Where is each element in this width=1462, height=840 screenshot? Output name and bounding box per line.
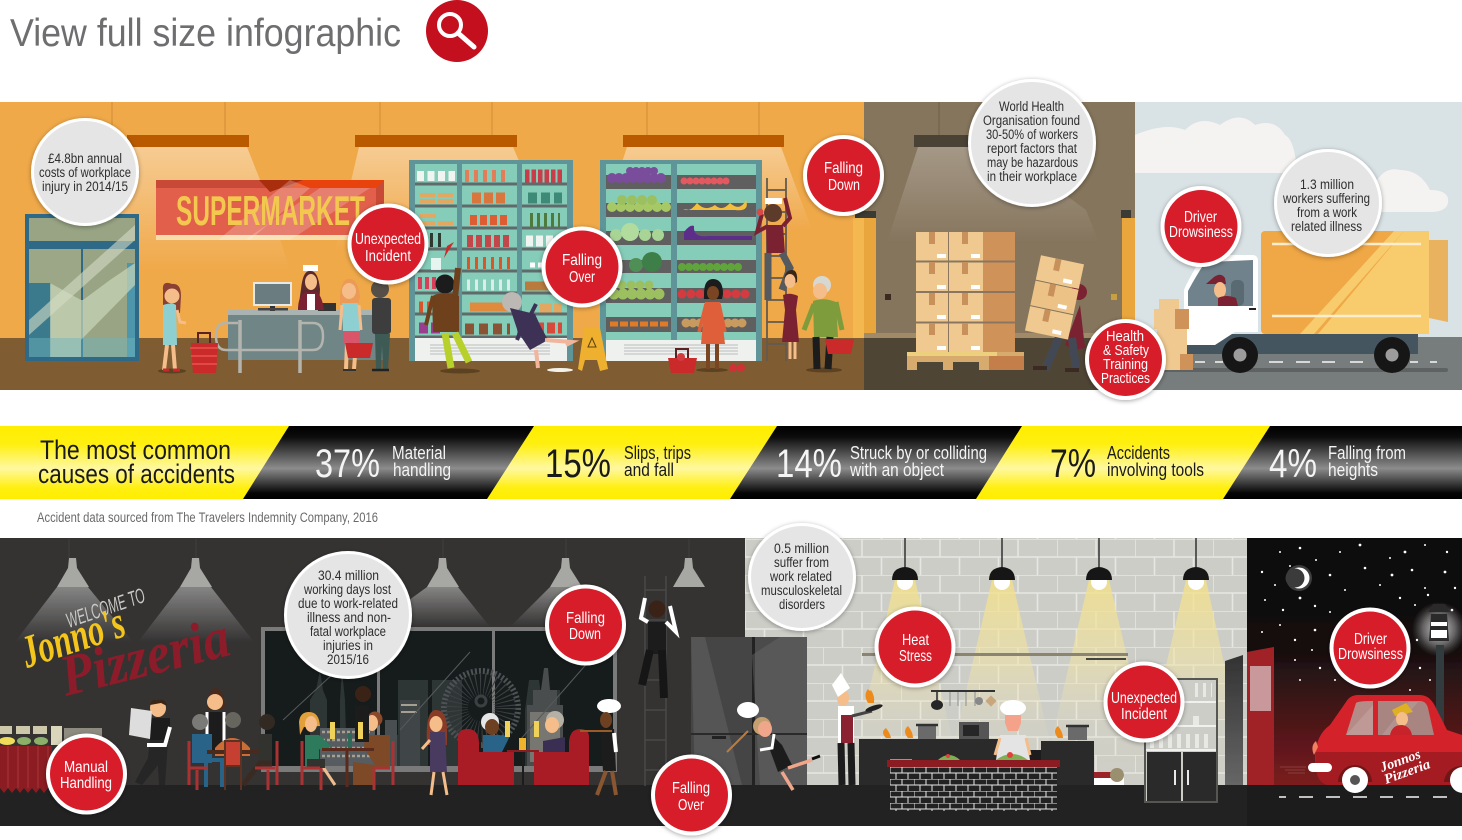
clouds (1135, 118, 1448, 212)
callout: £4.8bn annual costs (31, 118, 139, 226)
callout: health and safety training practices: Training (1103, 356, 1148, 373)
callout: World Health Organisation: Organisation found (983, 113, 1080, 128)
callout: driver drowsiness truck (1160, 186, 1242, 267)
callout: 1.3 million workers: workers suffering (1282, 191, 1370, 206)
panel: delivery truck scene (1135, 102, 1462, 390)
cashier (298, 265, 324, 310)
pizzeria wall sign: Jonno's (14, 596, 131, 678)
callout: falling down supermarket: Falling (824, 160, 863, 177)
callout: falling over supermarket: Over (569, 269, 596, 286)
waiter carrying plates (129, 699, 170, 785)
pendant lamps (15, 539, 705, 642)
basket stack (190, 333, 218, 373)
entrance door (25, 214, 139, 361)
callout: 1.3 million workers: from a work (1297, 205, 1357, 220)
woman with basket (340, 279, 373, 370)
panel: pizzeria restaurant scene (0, 538, 745, 826)
callout: unexpected incident supermarket (348, 204, 428, 284)
kitchen island (887, 752, 1060, 811)
callout: World Health Organisation: report factors that (987, 141, 1077, 156)
stars (1261, 544, 1456, 691)
truck driver (1206, 275, 1256, 310)
callout: manual handling (46, 734, 127, 814)
shoppers at checkout (158, 265, 391, 374)
stat: 15% slips, trips and fall: and fall (624, 460, 674, 480)
callout: 1.3 million workers (1274, 149, 1382, 257)
callout: driver drowsiness truck: Drowsiness (1169, 224, 1233, 241)
restaurant window and skyline (261, 627, 617, 772)
warehouse ceiling light (886, 135, 1100, 245)
pizza delivery car: Jonnos (1377, 747, 1423, 776)
man at checkout (371, 280, 391, 370)
woman in orange dress (696, 279, 728, 372)
callout: falling over pizzeria: Over (678, 797, 705, 814)
tall fridge edge (1225, 655, 1243, 785)
source note: Accident data sourced from The Travelers Indemnity Company, 2016 (37, 510, 378, 525)
stat: 4% falling from heights: heights (1328, 460, 1378, 480)
truck (1160, 231, 1448, 373)
callout: 0.5 million musculoskeletal disorders: suffer from (774, 555, 829, 570)
callout: 30.4 million working days: 30.4 million (318, 568, 379, 583)
callout: falling down pizzeria: Falling (566, 610, 605, 627)
supermarket sign (156, 180, 384, 240)
delivery van edge (1247, 647, 1274, 785)
stat: 15% slips, trips and fall (545, 442, 691, 486)
callout: 30.4 million working days: working days lost (303, 582, 391, 597)
callout: falling down pizzeria (545, 584, 626, 666)
stat: 4% falling from heights: Falling from (1328, 443, 1406, 463)
callout: 0.5 million musculoskeletal disorders: 0.5 million (774, 541, 829, 556)
callout: manual handling: Manual (64, 759, 108, 776)
callout: 0.5 million musculoskeletal disorders (748, 523, 856, 631)
callout: World Health Organisation: World Health (999, 99, 1064, 114)
callout: unexpected incident kitchen: Incident (1121, 706, 1167, 723)
stat: 15% slips, trips and fall: Slips, trips (624, 443, 691, 463)
ceiling lights (60, 135, 812, 270)
road markings (1279, 796, 1447, 798)
falling waitress (727, 702, 820, 790)
crescent moon (1286, 565, 1312, 591)
car driver (1390, 703, 1413, 735)
callout: driver drowsiness night: Driver (1354, 631, 1388, 648)
callout: falling over supermarket (542, 226, 622, 308)
shelf bar and utensils (862, 653, 1128, 710)
panel: warehouse scene (853, 102, 1135, 390)
wet floor sign and spill (547, 328, 608, 372)
title: view full size infographic: View full size infographic (10, 12, 401, 55)
waitress (782, 270, 799, 359)
callout: 30.4 million working days (284, 551, 412, 679)
ladder and waiter reaching lamp (641, 576, 676, 786)
pizzeria wall sign: Pizzeria (53, 604, 236, 709)
callout: unexpected incident supermarket: Incident (365, 248, 411, 265)
callout: 30.4 million working days: illness and non- (307, 610, 391, 625)
callout: driver drowsiness night (1330, 608, 1410, 688)
panel: commercial kitchen scene (691, 538, 1247, 826)
old man with basket (804, 276, 854, 372)
callout: falling over pizzeria (651, 754, 732, 836)
callout: World Health Organisation (968, 79, 1096, 207)
callout: 30.4 million working days: 2015/16 (327, 652, 369, 667)
shelving unit: groceries (409, 160, 573, 361)
stepladder (767, 178, 786, 361)
icon: magnifying glass button (426, 0, 488, 62)
stat: 7% accidents involving tools: Accidents (1107, 443, 1170, 463)
stat: 14% struck by or colliding with an object: 14% (776, 442, 842, 486)
stat: 7% accidents involving tools: 7% (1050, 442, 1096, 486)
callout: 0.5 million musculoskeletal disorders: work related (769, 569, 832, 584)
waitress with pizza (580, 699, 621, 795)
cooking range (859, 722, 1094, 785)
buffet table (0, 726, 102, 793)
stat: 7% accidents involving tools: involving tools (1107, 460, 1204, 480)
callout: 30.4 million working days: injuries in (323, 638, 373, 653)
callout: health and safety training practices: Health (1106, 328, 1144, 345)
callout: falling down supermarket (803, 135, 884, 216)
pizzeria wall sign (14, 584, 236, 709)
callout: World Health Organisation: in their workplace (987, 169, 1077, 184)
stat: 7% accidents involving tools (1050, 442, 1204, 486)
warehouse door rails (853, 210, 1135, 338)
callout: heat stress: Heat (902, 632, 929, 649)
man on ladder (756, 198, 790, 300)
callout: falling over pizzeria: Falling (672, 780, 710, 797)
hazard stripe banner: most common causes of accidents (0, 426, 1462, 499)
callout: unexpected incident kitchen: Unexpected (1111, 690, 1177, 707)
callout: 0.5 million musculoskeletal disorders: musculoskeletal (761, 583, 842, 598)
supermarket sign: SUPERMARKET (176, 187, 365, 234)
couple at window table (299, 686, 393, 790)
callout: 0.5 million musculoskeletal disorders: disorders (779, 597, 825, 612)
callout: unexpected incident kitchen (1104, 662, 1184, 742)
pizza delivery car: Pizzeria (1382, 757, 1432, 788)
panel: night-time pizza delivery scene (1247, 538, 1462, 826)
basket and apples on floor (668, 349, 745, 373)
callout: heat stress: Stress (899, 648, 932, 665)
chef tossing flaming pan (832, 673, 883, 785)
street lamp (1412, 602, 1462, 727)
callout: unexpected incident supermarket: Unexpected (355, 231, 421, 248)
callout: World Health Organisation: 30-50% of workers (986, 127, 1078, 142)
callout: health and safety training practices: Practices (1101, 370, 1150, 387)
callout: driver drowsiness truck: Driver (1184, 209, 1218, 226)
pendant lamps with yellow light (847, 538, 1247, 785)
stat: 37% material handling (315, 442, 451, 486)
stat: 4% falling from heights (1269, 442, 1406, 486)
stat: 15% slips, trips and fall: 15% (545, 442, 611, 486)
collapsed worker (1094, 768, 1124, 785)
chef at island (995, 700, 1030, 760)
banner heading: causes of accidents (38, 459, 235, 489)
callout: health and safety training practices (1085, 319, 1166, 400)
table of four diners (189, 688, 277, 790)
banner heading (38, 435, 235, 489)
pizzeria wall sign: WELCOME TO (63, 584, 148, 633)
callout: 1.3 million workers: related illness (1291, 219, 1362, 234)
callout: £4.8bn annual costs: costs of workplace (39, 165, 131, 180)
woman in purple dress (422, 710, 447, 795)
callout: driver drowsiness night: Drowsiness (1338, 646, 1403, 663)
stacked parcels by truck (1154, 299, 1193, 370)
stat: 4% falling from heights: 4% (1269, 442, 1317, 486)
callout: health and safety training practices: & Safety (1103, 342, 1149, 359)
cabinet with crockery (1145, 679, 1217, 802)
fridge (691, 637, 807, 785)
callout: World Health Organisation: may be hazardous (987, 155, 1078, 170)
worker carrying boxes (1025, 255, 1087, 370)
banner heading: The most common (40, 435, 231, 465)
falling woman (502, 292, 572, 368)
panel: supermarket scene (0, 102, 864, 390)
callout: falling over supermarket: Falling (562, 252, 602, 269)
pizza delivery car (1280, 695, 1462, 793)
callout: £4.8bn annual costs: £4.8bn annual (48, 151, 122, 166)
stat: 37% material handling: 37% (315, 442, 380, 486)
couple in armchairs (458, 711, 589, 785)
callout: 30.4 million working days: fatal workplace (310, 624, 386, 639)
callout: heat stress (874, 606, 956, 688)
callout: 30.4 million working days: due to work-related (298, 596, 398, 611)
stat: 37% material handling: handling (393, 460, 451, 480)
callout: falling down supermarket: Down (828, 177, 860, 194)
callout: £4.8bn annual costs: injury in 2014/15 (42, 179, 128, 194)
callout: 1.3 million workers: 1.3 million (1300, 177, 1354, 192)
stat: 14% struck by or colliding with an object (776, 442, 987, 486)
stat: 37% material handling: Material (392, 443, 446, 463)
callout: manual handling: Handling (60, 775, 112, 792)
pallet of boxes (907, 232, 1024, 370)
checkout counter (216, 282, 388, 373)
stat: 14% struck by or colliding with an object: Struck by or colliding (850, 443, 987, 463)
shelving unit: fruit and vegetables (600, 160, 762, 361)
shoppers and staff in the aisles (426, 198, 854, 374)
callout: falling down pizzeria: Down (569, 626, 601, 643)
stat: 14% struck by or colliding with an object: with an object (849, 460, 944, 480)
